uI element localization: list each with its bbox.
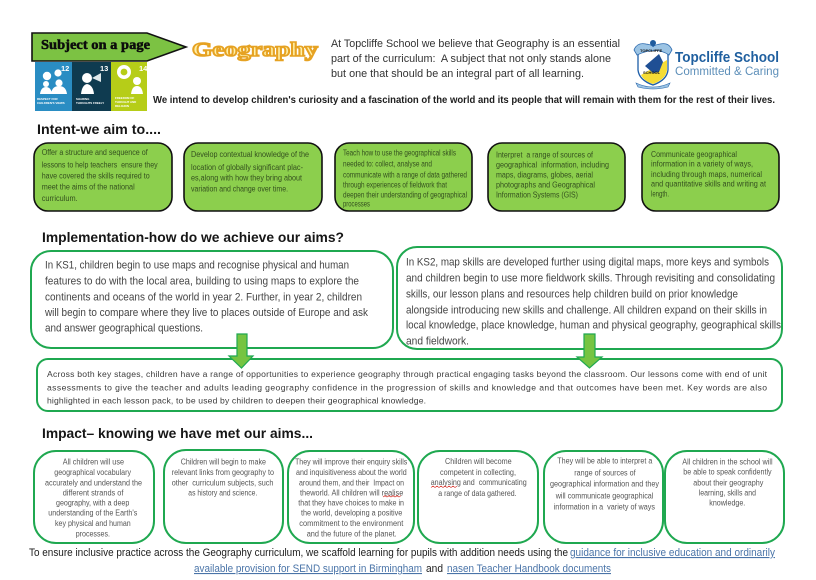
impact box 5: They will be able to interpret a [557, 456, 653, 466]
panel: across both key stages: highlighted in each lesson pack, to be used by children to deepen their geographical knowledge. [47, 396, 426, 406]
intent box 4 [488, 143, 625, 211]
impact box 5 [544, 451, 663, 543]
impact box 1: key physical and human [55, 519, 131, 528]
impact box 3: that they have choices to make in [298, 498, 404, 508]
impact box 6: about their geography [693, 478, 763, 488]
intent box 1 [34, 143, 172, 211]
heading: Impact: Impact– knowing we have met our aims... [42, 426, 313, 442]
impact box 6: learning, skills and [699, 488, 756, 498]
panel: KS1 [31, 251, 393, 348]
icon: article 13: SHARING [76, 97, 90, 101]
impact box 2: relevant links from geography to [172, 468, 274, 477]
school name and motto: Committed & Caring [675, 66, 779, 78]
impact box 4: a range of data gathered. [438, 489, 517, 498]
panel: KS1: and answer geographical questions. [45, 322, 203, 334]
impact box 2: as history and science. [188, 489, 257, 498]
icon: article 12: 12 [61, 64, 69, 73]
icon: article 13: THOUGHTS FREELY [76, 101, 104, 105]
footer: inclusive practice note with links: guidance for inclusive education and ordinarily [570, 547, 775, 559]
icons: rights respecting articles 12 13 14 [35, 62, 148, 111]
panel: KS2: skills, our lesson plans and resources help children build on prior knowledge [406, 288, 738, 300]
impact box 3: around them, and their Impact on [299, 478, 404, 487]
impact box 1: geographical vocabulary [54, 468, 131, 477]
intent box 4: Interpret a range of sources of [496, 150, 594, 160]
panel: KS1: features to do with the local area, building to using maps to explore the [45, 276, 359, 288]
heading: Implementation: Implementation-how do we achieve our aims? [42, 230, 344, 246]
panel: KS1: In KS1, children begin to use maps and recognise physical and human [45, 260, 349, 272]
impact box 6: All children in the school will [682, 458, 773, 466]
intent statement: We intend to develop children's curiosity and a fascination of the world and its people that will remain with them for the rest of their lives. [153, 95, 775, 106]
school logo crest: SCHOOL [643, 70, 661, 75]
icon: article 14: THOUGHT AND [115, 100, 136, 104]
icon: article 13 [72, 62, 111, 111]
impact box 6 [665, 451, 784, 543]
intent box 2: variation and change over time. [191, 184, 288, 194]
panel: KS2: and children begin to use more fieldwork skills. Through revisiting and consolidating [406, 272, 775, 284]
intent box 1: curriculum. [42, 194, 78, 203]
title: Geography wordart: Geography [192, 39, 318, 61]
impact box 2: other curriculum subjects, such [172, 478, 273, 487]
panel: KS2: alongside introducing new skills and challenge. All children expand on their skills in [406, 304, 767, 316]
intent box 2: Develop contextual knowledge of the [191, 150, 309, 159]
heading: Intent: Intent-we aim to.... [37, 122, 161, 138]
intent box 5 [642, 143, 779, 211]
impact box 1 [34, 451, 154, 543]
impact box 1: geography, with a deep [56, 498, 130, 508]
intent box 3 [335, 143, 472, 211]
school name and motto [675, 50, 779, 78]
intro paragraph: but one that should be an integral part of all learning. [331, 68, 584, 80]
impact box 1: understanding of the Earth's [48, 509, 137, 518]
arrow: KS2 to shared panel [577, 334, 602, 368]
intent box 1: have covered the skills required to [42, 172, 150, 180]
panel: KS1: will begin to compare where they live to places outside of Europe and ask [44, 307, 368, 319]
intent box 5: Communicate geographical [651, 150, 737, 159]
intent box 5: information in a variety of ways, [651, 160, 753, 168]
intent box 2 [184, 143, 322, 211]
intent box 1: meet the aims of the national [42, 182, 135, 192]
footer: inclusive practice note with links: nasen Teacher Handbook documents [447, 563, 611, 575]
icon: article 14 [111, 62, 148, 111]
icon: article 12: RESPECT FOR [37, 97, 58, 101]
impact box 3: theworld. All children will realise [300, 489, 404, 498]
panel: across both key stages: assessments to give the teacher and adults leading geography confidence in the progression of skills and knowledge and that outcomes have been met. Key words are also [47, 382, 767, 392]
intent box 5: and quantitative skills and writing at [651, 180, 767, 188]
intent box 3: needed to: collect, analyse and [343, 160, 432, 168]
footer: inclusive practice note with links [29, 547, 775, 575]
icon: article 12 [35, 62, 72, 111]
icon: article 12: CHILDREN'S VIEWS [37, 101, 65, 105]
intent box 3: deepen their understanding of geographical [343, 190, 467, 200]
intro paragraph [331, 38, 620, 80]
intro paragraph: At Topcliffe School we believe that Geography is an essential [331, 38, 620, 50]
intent box 3: through experiences of fieldwork that [343, 180, 448, 190]
impact box 1: All children will use [63, 458, 124, 466]
intent box 3: communicate with a range of data gathered [343, 170, 467, 180]
panel: across both key stages: Across both key stages, children have a range of opportunities to experience geography through practical engaging tasks beyond the classroom. Our lessons come with end of unit [47, 369, 768, 379]
intent box 3: processes [343, 200, 370, 208]
panel: intent boxes [34, 143, 779, 211]
school logo crest [634, 40, 672, 89]
panel: across both key stages [37, 359, 782, 411]
intent box 5: including through maps, numerical [651, 170, 762, 179]
intent box 1: lessons to help teachers ensure they [42, 160, 158, 170]
impact box 3: the world, developing a positive [301, 508, 403, 517]
panel: KS2: local knowledge, place knowledge, human and physical geography, geographical skills [406, 320, 781, 332]
banner arrow: Subject on a page [32, 33, 186, 61]
impact box 3: and inquisitiveness about the world [296, 468, 407, 477]
panel: KS2 [397, 247, 782, 349]
impact box 2 [164, 450, 283, 543]
impact box 4: analysing and communicating [431, 478, 527, 487]
impact box 3 [288, 451, 414, 543]
panel: impact boxes [34, 450, 784, 543]
impact box 2: Children will begin to make [181, 458, 266, 466]
intent box 2: location of globally significant plac- [191, 163, 303, 172]
panel: KS1: continents and oceans of the world in year 2. Further, in year 2, children [45, 292, 362, 304]
impact box 4: competent in collecting, [440, 468, 516, 477]
impact box 5: will communicate geographical [555, 492, 654, 500]
footer: inclusive practice note with links: To ensure inclusive practice across the Geography curriculum, we scaffold learning for pupils with addition needs using the [29, 547, 568, 559]
intent box 2: es,along with how they bring about [191, 174, 303, 182]
impact box 3: and the future of the planet. [307, 529, 397, 538]
school logo crest: TOPCLIFFE [640, 48, 662, 53]
footer: inclusive practice note with links: available provision for SEND support in Birmingham [194, 563, 422, 575]
icon: article 14: FREEDOM OF [115, 96, 135, 100]
impact box 1: processes. [76, 529, 110, 538]
intent box 4: photographs and Geographical [496, 180, 595, 190]
impact box 6: be able to speak confidently [683, 468, 772, 476]
intro paragraph: part of the curriculum: A subject that not only stands alone [331, 53, 611, 65]
impact box 5: geographical information and they [550, 480, 659, 488]
intent box 4: Information Systems (GIS) [496, 190, 578, 200]
intent box 4: maps, diagrams, globes, aerial [496, 170, 593, 180]
impact box 4: Children will become [445, 457, 512, 466]
intent box 3: Teach how to use the geographical skills [343, 148, 456, 158]
footer: inclusive practice note with links: and [426, 563, 443, 575]
school name and motto: Topcliffe School [675, 50, 779, 66]
intent box 1: Offer a structure and sequence of [42, 148, 148, 157]
intent box 4: geographical information, including [496, 160, 609, 170]
panel: KS2: In KS2, map skills are developed further using digital maps, more keys and symbols [406, 256, 769, 268]
impact box 3: commitment to the environment [299, 519, 404, 528]
icon: article 14: 14 [139, 64, 148, 73]
impact box 3: They will improve their enquiry skills [295, 458, 407, 466]
impact box 1: different strands of [63, 489, 124, 498]
icon: article 14: RELIGION [115, 104, 129, 108]
impact box 6: knowledge. [709, 498, 745, 508]
impact box 5: information in a variety of ways [554, 502, 655, 512]
arrow: KS1 to shared panel [229, 334, 253, 368]
impact box 4 [418, 451, 538, 543]
panel: KS2: and fieldwork. [406, 336, 469, 348]
icon: article 13: 13 [100, 64, 108, 73]
impact box 5: range of sources of [574, 468, 636, 478]
banner arrow: Subject on a page: Subject on a page [41, 38, 150, 53]
impact box 1: accurately and understand the [45, 478, 142, 487]
intent box 5: length. [651, 190, 669, 198]
